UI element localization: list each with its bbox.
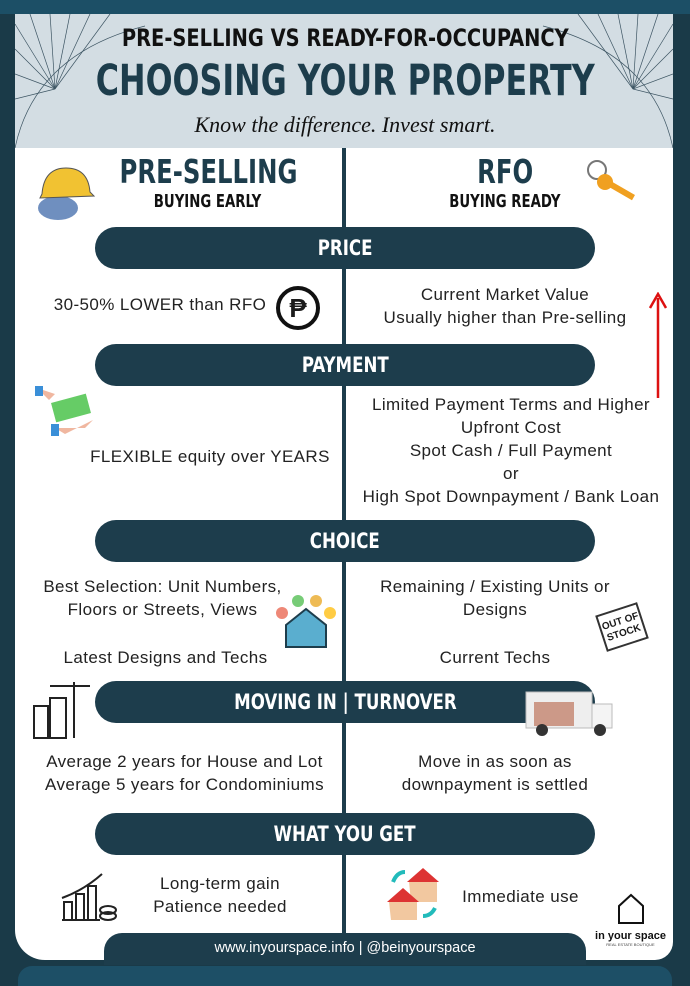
icon: peso: ₱	[289, 293, 307, 323]
pill: payment: PAYMENT	[302, 353, 388, 377]
icon: out of stock	[595, 602, 649, 652]
text: payment right: Spot Cash / Full Payment	[410, 441, 612, 460]
pill: choice: CHOICE	[310, 529, 380, 553]
pill: payment	[95, 344, 595, 386]
header	[15, 14, 673, 148]
text: choice right 2: Current Techs	[440, 648, 550, 667]
text: price right: Usually higher than Pre-selling	[384, 308, 626, 327]
text: payment right: Upfront Cost	[461, 418, 561, 437]
pill: moving in	[95, 681, 595, 723]
logo	[595, 894, 666, 947]
text: payment right	[363, 395, 659, 506]
text: moving right: Move in as soon as	[418, 752, 572, 771]
logo: REAL ESTATE BOUTIQUE	[606, 942, 655, 947]
text: price left: 30-50% LOWER than RFO	[54, 295, 266, 314]
icon: money hands	[35, 386, 93, 436]
pill: what you get: WHAT YOU GET	[274, 822, 416, 846]
icon: peso	[276, 286, 320, 330]
pill: price	[95, 227, 595, 269]
text: moving right: downpayment is settled	[402, 775, 588, 794]
title: subtitle: PRE-SELLING VS READY-FOR-OCCUPANCY	[122, 24, 568, 52]
pill: price: PRICE	[318, 236, 372, 260]
text: price right	[384, 285, 626, 327]
text: moving left	[45, 752, 324, 794]
icon: crane buildings	[33, 682, 90, 739]
text: get left	[153, 874, 287, 916]
footer: www.inyourspace.info | @beinyourspace	[214, 940, 476, 956]
heading: rfo	[449, 152, 561, 212]
title: CHOOSING YOUR PROPERTY	[96, 56, 594, 106]
text: payment left: FLEXIBLE equity over YEARS	[90, 447, 330, 466]
icon: smart home	[276, 595, 336, 648]
pill: what you get	[95, 813, 595, 855]
pill: choice	[95, 520, 595, 562]
text: choice left: Best Selection: Unit Numbers,	[43, 577, 282, 596]
text: choice left 2: Latest Designs and Techs	[64, 648, 267, 667]
text: choice left	[43, 577, 282, 619]
text: choice left: Floors or Streets, Views	[68, 600, 257, 619]
icon: truck	[526, 692, 612, 736]
text: moving left: Average 5 years for Condominiums	[45, 775, 324, 794]
logo: in your space	[595, 930, 666, 942]
icon: hard hat	[38, 168, 95, 220]
text: moving right	[402, 752, 588, 794]
heading: pre-selling	[119, 152, 297, 212]
divider	[342, 148, 346, 933]
heading: rfo: BUYING READY	[449, 191, 561, 212]
text: get right: Immediate use	[462, 887, 579, 906]
heading: pre-selling: PRE-SELLING	[119, 152, 297, 191]
text: moving left: Average 2 years for House and Lot	[46, 752, 323, 771]
icon: houses	[387, 868, 439, 920]
icon: red arrow	[649, 292, 667, 398]
text: choice right: Designs	[463, 600, 527, 619]
text: get left: Patience needed	[153, 897, 287, 916]
text: choice right	[380, 577, 610, 619]
text: get left: Long-term gain	[160, 874, 280, 893]
pill: moving in: MOVING IN | TURNOVER	[234, 690, 456, 714]
footer	[104, 933, 586, 965]
icon: growth chart	[62, 873, 117, 921]
tagline: Know the difference. Invest smart.	[194, 112, 496, 137]
text: price right: Current Market Value	[421, 285, 589, 304]
icon: keys	[587, 160, 635, 200]
text: payment right: Limited Payment Terms and Higher	[372, 395, 650, 414]
text: choice right: Remaining / Existing Units or	[380, 577, 610, 596]
heading: pre-selling: BUYING EARLY	[154, 191, 262, 212]
icon: out of stock: OUT OF	[601, 611, 640, 633]
icon: out of stock: STOCK	[606, 623, 642, 644]
text: payment right: High Spot Downpayment / Bank Loan	[363, 487, 659, 506]
heading: rfo: RFO	[477, 152, 533, 191]
text: payment right: or	[503, 464, 519, 483]
